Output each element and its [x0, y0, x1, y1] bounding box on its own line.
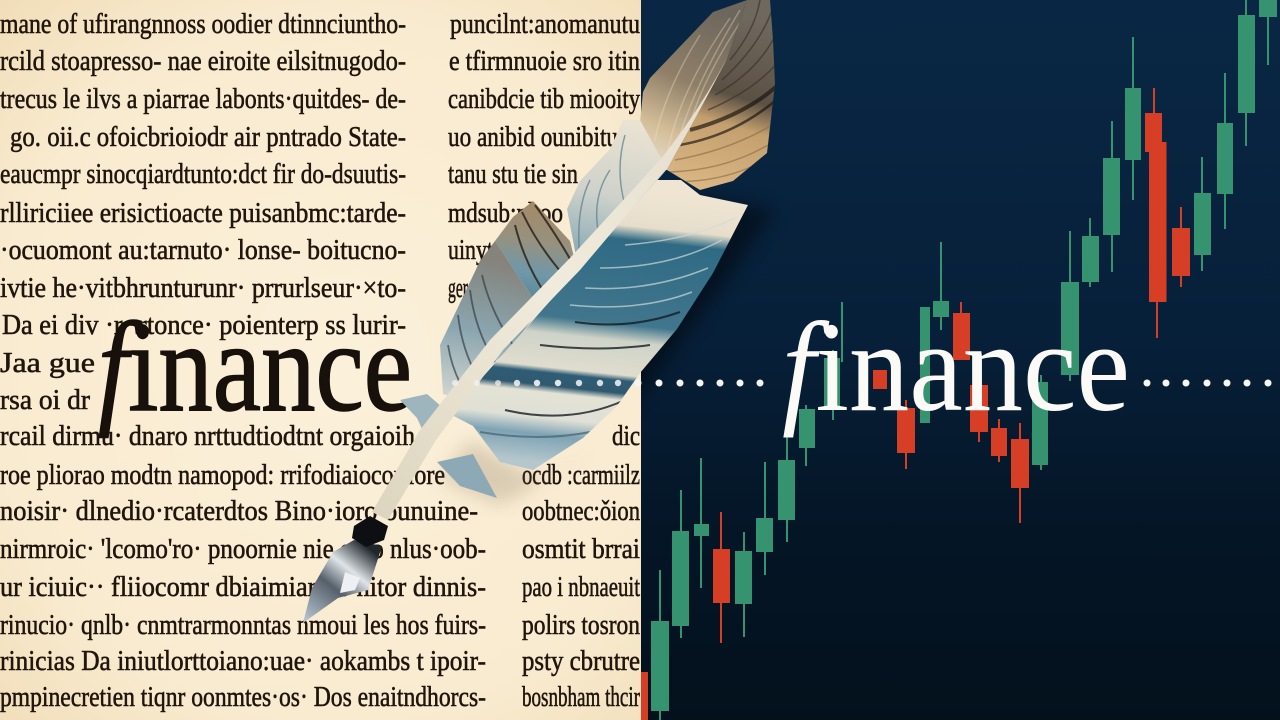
- text block: lower left newspaper column: roe pliorao modtn namopod: rrifodiaiocor iore: [0, 460, 445, 491]
- chart: candlesticks, green up and red down: [641, 0, 1277, 720]
- text block: upper left newspaper column: [0, 9, 406, 416]
- text block: lower right newspaper column: dic: [612, 421, 640, 452]
- feather shadow on paper: [440, 440, 600, 505]
- vane: small lower barb: [437, 454, 497, 498]
- text block: upper right newspaper column: [448, 9, 640, 304]
- text block: upper right newspaper column: puncilnt:anomanutu: [450, 9, 640, 40]
- green candles: [651, 0, 1277, 720]
- red candles: [641, 88, 1190, 720]
- text block: lower right newspaper column: oobtnec:ǒion: [522, 496, 640, 527]
- ink ferrule: [352, 516, 388, 547]
- text block: upper right newspaper column: uo anibid ounibitu: [448, 122, 618, 153]
- dotted line across the feather and navy: [452, 380, 764, 386]
- text block: lower right newspaper column: ocdb :carmiilz: [522, 460, 640, 491]
- feather shadow on navy: [641, 192, 772, 398]
- text block: lower right newspaper column: bosnbham thcir: [522, 682, 640, 713]
- heading: finance in black on paper: finance: [98, 296, 412, 438]
- text block: lower left newspaper column: [0, 421, 486, 713]
- icon: quill feather with nib: [303, 0, 790, 623]
- text block: upper left newspaper column: Da ei div ·r· rtonce· poienterp ss lurir-: [2, 310, 406, 341]
- dotted line, right segment: [1144, 380, 1272, 386]
- text block: upper right newspaper column: tanu stu tie sin: [448, 159, 578, 190]
- text block: lower right newspaper column: pao i nbnaeuit: [522, 572, 640, 603]
- text block: upper left newspaper column: ·ocuomont au:tarnuto· lonse- boitucno-: [0, 235, 406, 266]
- vane: brown and blue section: [495, 201, 574, 297]
- text block: upper left newspaper column: rsa oi dr: [0, 385, 91, 416]
- text block: lower right newspaper column: [522, 421, 640, 713]
- text block: upper left newspaper column: go. oii.c ofoicbrioiodr air pntrado State-: [10, 122, 406, 153]
- text block: upper right newspaper column: mdsub:nhoo: [448, 198, 563, 229]
- text block: lower left newspaper column: rinucio· qnlb· cnmtrarmonntas nmoui les hos fuirs-: [0, 610, 486, 641]
- text block: upper right newspaper column: ger: [448, 273, 468, 304]
- text block: lower left newspaper column: pmpinecretien tiqnr oonmtes·os· Dos enaitndhorcs-: [0, 682, 486, 713]
- panel: aged newspaper background: [0, 0, 642, 720]
- text block: lower right newspaper column: psty cbrutre: [522, 646, 640, 677]
- vane: gray blue lower section: [440, 241, 532, 395]
- quill shaft: [372, 58, 727, 520]
- vane: top left brown to cream: [640, 0, 747, 170]
- text block: upper left newspaper column: ivtie he·vitbhrunturunr· prrurlseur·×to-: [0, 273, 406, 304]
- nib: [303, 540, 382, 623]
- panel: dark navy chart background: [641, 0, 1280, 720]
- text block: upper right newspaper column: uinyt: [448, 235, 493, 266]
- text block: lower left newspaper column: ur iciuic·· fliiocomr dbiaimiarsso nitor dinnis-: [0, 572, 486, 603]
- vane: top right brown and tan: [667, 0, 775, 190]
- text block: upper left newspaper column: eaucmpr sinocqiardtunto:dct fir do-dsuutis-: [0, 159, 406, 190]
- vane: small left barb: [400, 394, 450, 442]
- text block: lower left newspaper column: rcail dirmu· dnaro nrttudtiodtnt orgaioih: [0, 421, 415, 452]
- text block: upper right newspaper column: e tfirmnuoie sro itin: [449, 46, 640, 77]
- text block: upper right newspaper column: canibdcie tib miooity: [448, 84, 640, 115]
- text block: upper left newspaper column: mane of ufirangnnoss oodier dtinnciuntho-: [0, 9, 406, 40]
- text block: lower left newspaper column: rinicias Da iniutlorttoiano:uae· aokambs t ipoir-: [0, 646, 486, 677]
- text block: lower right newspaper column: polirs tosron: [522, 610, 640, 641]
- text block: lower left newspaper column: nirmroic· 'lcomo'ro· pnoornie nie qp o nlus·oob-: [0, 534, 486, 565]
- vane: right side cream and blue bands: [454, 180, 748, 470]
- text block: upper left newspaper column: Jaa gue: [0, 348, 95, 379]
- text block: lower left newspaper column: noisir· dlnedio·rcaterdtos Bino·ioro ounuine-: [0, 496, 478, 527]
- vane: cream to blue section: [567, 120, 666, 252]
- text block: upper left newspaper column: rcild stoapresso- nae eiroite eilsitnugodo-: [0, 46, 406, 77]
- text block: upper left newspaper column: trecus le ilvs a piarrae labonts·quitdes- de-: [0, 84, 406, 115]
- text block: lower right newspaper column: osmtit brrai: [522, 534, 640, 565]
- heading: finance in white on navy: finance: [782, 296, 1130, 438]
- text block: upper left newspaper column: rlliriciiee erisictioacte puisanbmc:tarde-: [0, 198, 406, 229]
